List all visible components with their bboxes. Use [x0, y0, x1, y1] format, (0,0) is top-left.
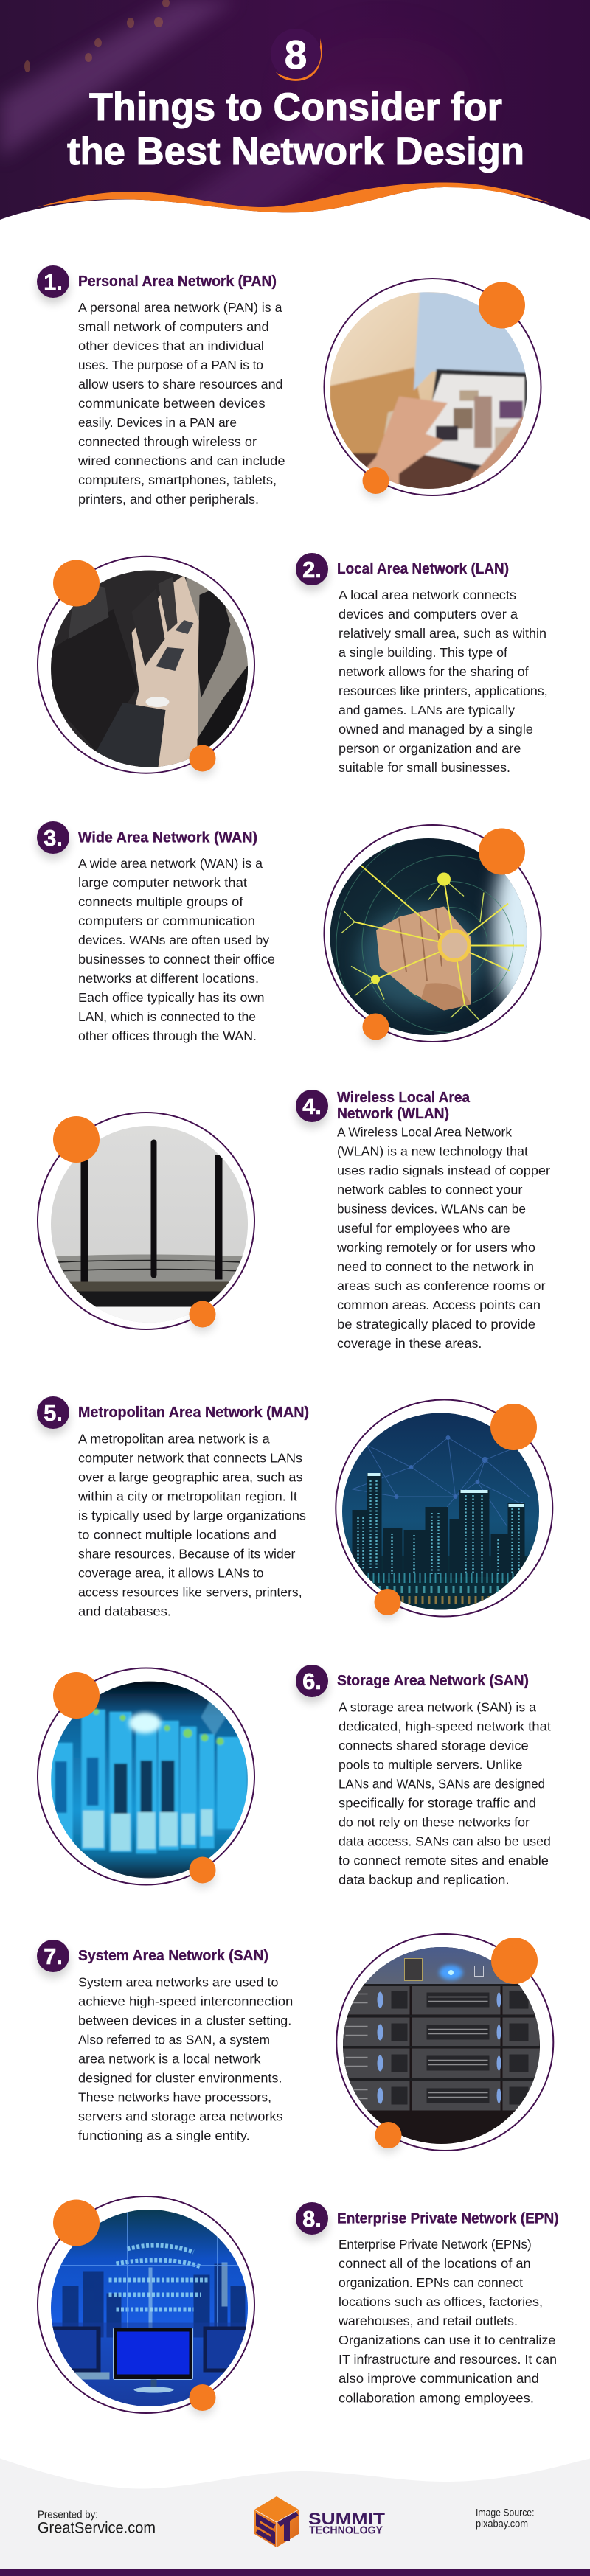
orange accent large 7: [491, 1938, 538, 1984]
body text 1: other devices that an individual: [78, 338, 264, 353]
number badge 2: [296, 553, 328, 591]
footer: [0, 2458, 590, 2576]
body text 8: collaboration among employees.: [339, 2390, 534, 2405]
number badge 7: [37, 1940, 69, 1978]
body text 4: common areas. Access points can: [337, 1298, 541, 1312]
presented by: Presented by:: [38, 2510, 98, 2521]
body text 3: A wide area network (WAN) is a: [78, 856, 263, 871]
body text 6: data backup and replication.: [339, 1873, 510, 1887]
body text 2: [339, 588, 548, 775]
body text 4: uses radio signals instead of copper: [337, 1163, 550, 1178]
logo: Summit Technology: TECHNOLOGY: [309, 2524, 383, 2536]
heading 3: Wide Area Network (WAN): [78, 830, 257, 846]
body text 2: resources like printers, applications,: [339, 683, 548, 698]
body text 5: computer network that connects LANs: [78, 1451, 302, 1466]
body text 3: other offices through the WAN.: [78, 1028, 257, 1043]
number badge 8: [296, 2202, 328, 2241]
number 8 badge: 8: [285, 32, 307, 77]
body text 4: need to connect to the network in: [337, 1259, 534, 1274]
body text 1: connected through wireless or: [78, 434, 257, 449]
body text 8: organization. EPNs can connect: [339, 2275, 523, 2290]
body text 1: printers, and other peripherals.: [78, 492, 259, 507]
body text 7: achieve high-speed interconnection: [78, 1994, 293, 2008]
image ring 6: [38, 1668, 254, 1888]
orange accent small 5: [375, 1589, 401, 1615]
body text 5: A metropolitan area network is a: [78, 1432, 270, 1447]
body text 5: access resources like servers, printers,: [78, 1585, 302, 1600]
body text 7: area network is a local network: [78, 2051, 261, 2066]
panel: Wireless Local Area Network: [38, 1090, 550, 1351]
heading 8: Enterprise Private Network (EPN): [337, 2210, 559, 2227]
body text 7: designed for cluster environments.: [78, 2070, 282, 2085]
panel: Local Area Network: [38, 553, 548, 776]
orange accent small 4: [189, 1301, 215, 1327]
body text 4: working remotely or for users who: [336, 1240, 535, 1255]
body text 3: businesses to connect their office: [78, 952, 275, 967]
body text 1: easily. Devices in a PAN are: [78, 415, 237, 430]
heading 2: Local Area Network (LAN): [337, 561, 509, 577]
body text 6: connects shared storage device: [339, 1738, 529, 1753]
panel: Storage Area Network: [38, 1665, 551, 1888]
body text 1: uses. The purpose of a PAN is to: [78, 358, 263, 372]
number badge 5: 5.: [44, 1400, 63, 1426]
body text 8: Organizations can use it to centralize: [339, 2333, 555, 2347]
body text 1: computers, smartphones, tablets,: [78, 473, 277, 487]
body text 5: within a city or metropolitan region. It: [77, 1489, 297, 1504]
number badge 1: [37, 265, 69, 304]
heading 7: System Area Network (SAN): [78, 1948, 268, 1964]
panel: Personal Area Network: [37, 265, 541, 507]
number badge 4: [296, 1090, 328, 1128]
orange accent small 7: [375, 2122, 401, 2148]
body text 4: network cables to connect your: [337, 1183, 523, 1197]
body text 5: share resources. Because of its wider: [78, 1547, 296, 1562]
heading 6: Storage Area Network (SAN): [337, 1673, 529, 1689]
body text 8: locations such as offices, factories,: [339, 2294, 543, 2309]
body text 2: network allows for the sharing of: [339, 664, 529, 679]
presented by: [38, 2510, 156, 2536]
body text 1: [77, 300, 285, 507]
body text 6: data access. SANs can also be used: [339, 1834, 551, 1849]
body text 3: devices. WANs are often used by: [78, 933, 269, 947]
body text 4: coverage in these areas.: [337, 1336, 482, 1351]
body text 5: to connect multiple locations and: [78, 1528, 277, 1542]
orange accent large 2: [53, 560, 100, 606]
body text 2: a single building. This type of: [339, 645, 507, 660]
body text 8: Enterprise Private Network (EPNs): [339, 2237, 532, 2252]
body text 2: suitable for small businesses.: [339, 760, 510, 775]
body text 6: [339, 1700, 551, 1887]
body text 5: coverage area, it allows LANs to: [78, 1566, 264, 1581]
body text 2: and games. LANs are typically: [339, 703, 515, 717]
body text 4: business devices. WLANs can be: [337, 1202, 526, 1216]
body text 5: over a large geographic area, such as: [78, 1470, 303, 1485]
body text 2: owned and managed by a single: [339, 722, 533, 737]
orange accent large 6: [53, 1672, 100, 1719]
body text 8: also improve communication and: [339, 2371, 539, 2386]
image ring 7: [336, 1934, 553, 2153]
body text 4: useful for employees who are: [337, 1221, 510, 1236]
orange accent large 5: [490, 1404, 537, 1450]
presented by: GreatService.com: [38, 2520, 156, 2536]
logo: Summit Technology: SUMMIT: [308, 2510, 386, 2528]
number 8 badge: [271, 29, 322, 81]
orange accent large 3: [479, 829, 525, 874]
body text 7: System area networks are used to: [78, 1974, 278, 1989]
panel: Enterprise Private Network: [38, 2196, 559, 2415]
number badge 1: 1.: [44, 269, 63, 295]
image ring 5: [336, 1399, 552, 1620]
body text 3: [78, 856, 275, 1043]
body text 8: IT infrastructure and resources. It can: [339, 2352, 557, 2367]
heading 1: Personal Area Network (PAN): [78, 274, 277, 290]
number badge 3: 3.: [44, 825, 63, 851]
body text 6: dedicated, high-speed network that: [339, 1719, 551, 1734]
title: the Best Network Design: [67, 130, 524, 173]
orange accent large 8: [53, 2200, 100, 2246]
heading 4: Network (WLAN): [337, 1106, 449, 1122]
body text 6: A storage area network (SAN) is a: [339, 1700, 536, 1715]
orange accent small 6: [189, 1856, 215, 1883]
body text 7: functioning as a single entity.: [78, 2128, 250, 2142]
body text 8: [338, 2237, 557, 2405]
body text 7: servers and storage area networks: [78, 2109, 283, 2123]
body text 3: Each office typically has its own: [78, 990, 264, 1005]
body text 3: connects multiple groups of: [78, 894, 243, 909]
heading 4: Wireless Local Area: [337, 1090, 471, 1106]
body text 7: Also referred to as SAN, a system: [78, 2032, 270, 2047]
heading 5: Metropolitan Area Network (MAN): [78, 1404, 309, 1421]
body text 1: wired connections and can include: [77, 453, 285, 468]
body text 4: be strategically placed to provide: [337, 1317, 535, 1331]
orange accent small 2: [189, 745, 215, 771]
body text 3: LAN, which is connected to the: [78, 1009, 256, 1024]
image ring 2: [38, 557, 254, 776]
image ring 1: [324, 279, 541, 498]
image ring 4: [38, 1113, 254, 1332]
number badge 4: 4.: [302, 1093, 322, 1119]
orange accent large 4: [53, 1116, 100, 1163]
body text 6: do not rely on these networks for: [339, 1815, 530, 1830]
body text 3: large computer network that: [78, 875, 247, 890]
number badge 5: [37, 1396, 69, 1435]
header banner: [0, 0, 590, 230]
orange accent small 3: [363, 1013, 389, 1040]
title: Things to Consider for: [89, 86, 502, 129]
body text 4: areas such as conference rooms or: [337, 1278, 546, 1293]
body text 2: relatively small area, such as within: [339, 626, 546, 641]
panel: Wide Area Network: [37, 821, 565, 1059]
number badge 6: 6.: [302, 1668, 322, 1694]
body text 5: is typically used by large organizations: [78, 1508, 306, 1523]
body text 1: small network of computers and: [78, 319, 269, 334]
image source: [476, 2507, 534, 2529]
body text 4: A Wireless Local Area Network: [337, 1125, 512, 1140]
body text 5: and databases.: [78, 1604, 171, 1619]
image source: pixabay.com: [476, 2518, 528, 2529]
body text 2: person or organization and are: [339, 741, 521, 756]
body text 2: devices and computers over a: [339, 607, 518, 622]
body text 4: (WLAN) is a new technology that: [337, 1144, 528, 1159]
body text 7: These networks have processors,: [78, 2089, 271, 2104]
orange accent small 8: [189, 2384, 215, 2411]
panel: Metropolitan Area Network: [37, 1396, 552, 1620]
image ring 3: [323, 824, 541, 1047]
body text 3: networks at different locations.: [78, 971, 259, 986]
number badge 6: [296, 1665, 328, 1703]
body text 7: [78, 1974, 293, 2142]
body text 6: pools to multiple servers. Unlike: [339, 1758, 522, 1772]
body text 2: A local area network connects: [339, 588, 516, 602]
logo: Summit Technology: [254, 2496, 386, 2547]
orange accent large 1: [479, 282, 525, 329]
body text 7: between devices in a cluster setting.: [78, 2013, 291, 2027]
image ring 8: [38, 2196, 254, 2415]
orange accent small 1: [363, 467, 389, 494]
body text 1: communicate between devices: [78, 396, 266, 411]
title: [67, 86, 524, 173]
panel: System Area Network: [37, 1934, 553, 2153]
body text 6: specifically for storage traffic and: [339, 1796, 536, 1811]
body text 5: [77, 1432, 306, 1619]
number badge 8: 8.: [302, 2206, 322, 2232]
body text 4: [336, 1125, 550, 1351]
body text 3: computers or communication: [78, 913, 255, 928]
heading 4: [337, 1090, 471, 1122]
body text 6: LANs and WANs, SANs are designed: [339, 1777, 545, 1792]
body text 8: connect all of the locations of an: [339, 2256, 531, 2271]
number badge 3: [37, 821, 69, 860]
body text 1: allow users to share resources and: [78, 377, 283, 391]
body text 6: to connect remote sites and enable: [339, 1853, 549, 1868]
image source: Image Source:: [476, 2507, 534, 2518]
body text 8: warehouses, and retail outlets.: [338, 2314, 518, 2328]
number badge 7: 7.: [44, 1943, 63, 1969]
body text 1: A personal area network (PAN) is a: [78, 300, 282, 315]
number badge 2: 2.: [302, 557, 322, 582]
